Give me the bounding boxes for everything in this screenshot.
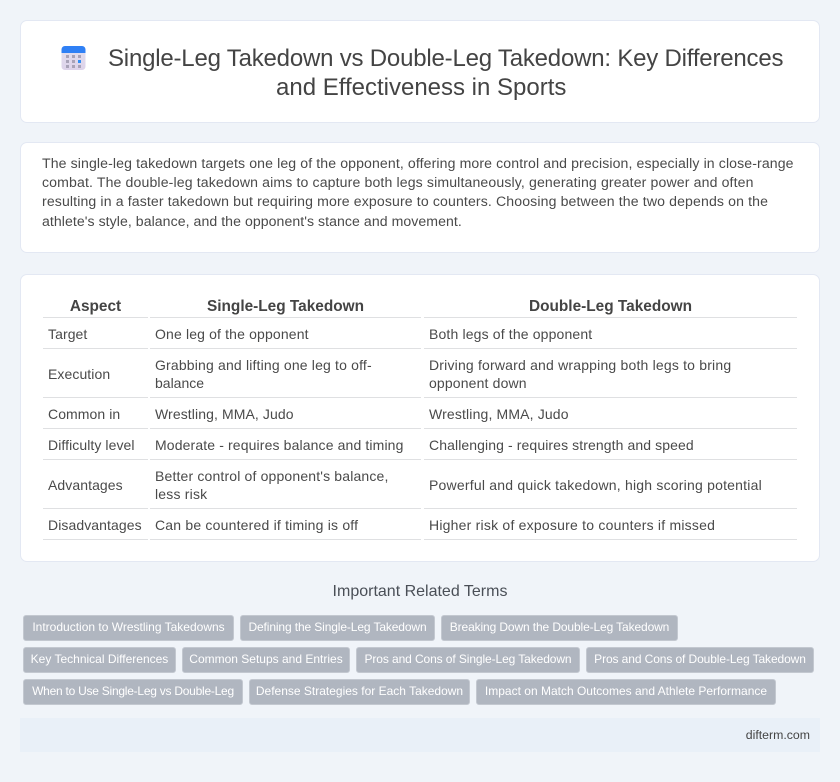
tags: related terms: Impact on Match Outcomes and Athlete Performance (485, 684, 767, 698)
table: comparison: Execution (48, 366, 110, 382)
heading: related terms: Important Related Terms (333, 583, 507, 600)
table: comparison: Higher risk of exposure to counters if missed (429, 517, 715, 533)
table: comparison: balance (155, 375, 204, 391)
table: comparison: Both legs of the opponent (429, 326, 592, 342)
icon: calendar (62, 46, 86, 70)
table: comparison: Moderate - requires balance and timing (155, 437, 404, 453)
tags: related terms: When to Use Single-Leg vs Double-Leg (32, 684, 234, 698)
tags: related terms: Introduction to Wrestling Takedowns (32, 620, 225, 634)
table: comparison: Disadvantages (48, 517, 142, 533)
panel: description card (20, 142, 820, 253)
tags: related terms: Defense Strategies for Each Takedown (256, 684, 463, 698)
table: comparison: Driving forward and wrapping both legs to bring (429, 357, 731, 373)
table: comparison: Aspect (70, 298, 121, 315)
table: comparison: Advantages (48, 477, 123, 493)
table: comparison: Wrestling, MMA, Judo (429, 406, 569, 422)
table: comparison: less risk (155, 486, 207, 502)
tags: related terms: Pros and Cons of Double-Leg Takedown (594, 652, 806, 666)
footer bar (20, 718, 820, 752)
title: and Effectiveness in Sports (276, 74, 566, 101)
tags: related terms: Key Technical Differences (31, 652, 168, 666)
table: comparison: Difficulty level (48, 437, 135, 453)
table: comparison: Grabbing and lifting one leg to off- (155, 357, 372, 373)
panel: comparison table card (20, 274, 820, 562)
table: comparison: Wrestling, MMA, Judo (155, 406, 294, 422)
table: comparison: Common in (48, 406, 120, 422)
text block: description: athlete's style, balance, and the opponent's stance and movement. (42, 213, 462, 229)
tags: related terms: Common Setups and Entries (189, 652, 343, 666)
text block: description: resulting in a faster takedown but requiring more exposure to counters. Choosing between the two depends on the (42, 193, 768, 209)
table: comparison: Can be countered if timing is off (155, 517, 358, 533)
table: comparison: Double-Leg Takedown (529, 298, 692, 315)
footer text: difterm.com (746, 728, 810, 742)
text block: description (42, 155, 794, 229)
tags: related terms: Pros and Cons of Single-Leg Takedown (364, 652, 571, 666)
table: comparison: One leg of the opponent (155, 326, 309, 342)
tags: related terms: Breaking Down the Double-Leg Takedown (450, 620, 669, 634)
text block: description: The single-leg takedown targets one leg of the opponent, offering more control and precision, especially in close-range (42, 155, 794, 171)
table: comparison: opponent down (429, 375, 527, 391)
table: comparison: Target (48, 326, 87, 342)
panel: header card (20, 20, 820, 123)
table: comparison: Powerful and quick takedown, high scoring potential (429, 477, 762, 493)
table: comparison: Challenging - requires strength and speed (429, 437, 694, 453)
tags: related terms: Defining the Single-Leg Takedown (248, 620, 427, 634)
text block: description: combat. The double-leg takedown aims to capture both legs simultaneously, generating greater power and often (42, 174, 754, 190)
table: comparison: Better control of opponent's balance, (155, 468, 389, 484)
table: comparison (43, 298, 797, 540)
title: Single-Leg Takedown vs Double-Leg Takedown: Key Differences (108, 45, 783, 72)
table: comparison: Single-Leg Takedown (207, 298, 364, 315)
tags: related terms (23, 615, 814, 705)
title (108, 45, 783, 101)
